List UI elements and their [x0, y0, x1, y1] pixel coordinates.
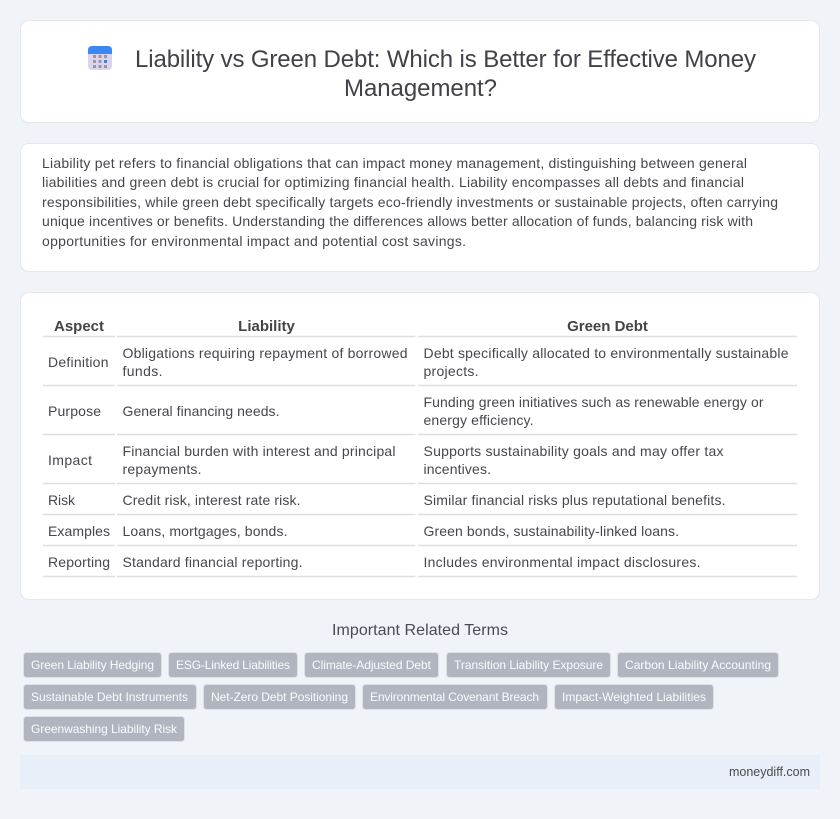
row: impact: Impact: [48, 452, 92, 468]
row: definition: projects.: [424, 363, 478, 379]
row: purpose: energy efficiency.: [424, 412, 534, 428]
title: Management?: [344, 75, 497, 102]
row: risk: Similar financial risks plus reputational benefits.: [424, 492, 726, 508]
row: examples: Examples: [48, 523, 110, 539]
row: reporting: Reporting: [48, 554, 110, 570]
table header: Aspect: [54, 318, 104, 335]
row: definition: Definition: [48, 354, 108, 370]
related term tags: Sustainable Debt Instruments: [31, 690, 188, 704]
related term tags: Net-Zero Debt Positioning: [211, 690, 348, 704]
title: Liability vs Green Debt: Which is Better for Effective Money: [135, 46, 756, 73]
related term tags: Impact-Weighted Liabilities: [562, 690, 706, 704]
row: reporting: [48, 554, 700, 570]
row: impact: Financial burden with interest and principal: [122, 443, 396, 459]
row: definition: [48, 345, 789, 379]
related term tags: ESG-Linked Liabilities: [176, 658, 290, 672]
icon: calendar: [88, 46, 112, 70]
related term tags: Greenwashing Liability Risk: [31, 722, 178, 736]
text block: description: Liability pet refers to financial obligations that can impact money management, distinguishing between general: [42, 155, 747, 171]
row: purpose: Funding green initiatives such as renewable energy or: [424, 394, 764, 410]
row: reporting: Includes environmental impact disclosures.: [424, 554, 700, 570]
row: risk: Credit risk, interest rate risk.: [122, 492, 300, 508]
text block: description: responsibilities, while green debt specifically targets eco-friendly investments or sustainable projects, often carrying: [42, 194, 778, 210]
text block: description: liabilities and green debt is crucial for optimizing financial health. Liability encompasses all debts and financial: [42, 174, 744, 190]
row: reporting: Standard financial reporting.: [122, 554, 302, 570]
row: impact: Supports sustainability goals and may offer tax: [424, 443, 724, 459]
row: impact: incentives.: [424, 461, 491, 477]
row: purpose: General financing needs.: [122, 403, 280, 419]
row: examples: [48, 523, 679, 539]
related term tags: Green Liability Hedging: [31, 658, 154, 672]
related term tags: [24, 652, 778, 742]
row: definition: Debt specifically allocated to environmentally sustainable: [424, 345, 789, 361]
row: risk: Risk: [48, 492, 76, 508]
footer: moneydiff.com: [729, 765, 810, 779]
title: [135, 46, 756, 102]
row: examples: Green bonds, sustainability-linked loans.: [424, 523, 679, 539]
text block: description: opportunities for environmental impact and potential cost savings.: [42, 233, 466, 249]
row: definition: Obligations requiring repayment of borrowed: [122, 345, 408, 361]
related term tags: Transition Liability Exposure: [454, 658, 603, 672]
row: risk: [48, 492, 726, 508]
table header: Green Debt: [567, 318, 648, 335]
row: impact: repayments.: [122, 461, 202, 477]
row: purpose: [48, 394, 764, 428]
row: examples: Loans, mortgages, bonds.: [122, 523, 288, 539]
panel: header: [20, 20, 820, 122]
table header: Liability: [238, 318, 295, 335]
panel: description: [20, 144, 820, 272]
text block: description: [42, 155, 778, 249]
panel: comparison table: [20, 292, 820, 600]
row: purpose: Purpose: [48, 403, 101, 419]
row: definition: funds.: [122, 363, 162, 379]
row: impact: [48, 443, 724, 477]
text block: description: unique incentives or benefits. Understanding the differences allows better allocation of funds, balancing risk with: [42, 213, 753, 229]
related term tags: Climate-Adjusted Debt: [312, 658, 432, 672]
related term tags: Carbon Liability Accounting: [625, 658, 771, 672]
footer: [20, 755, 820, 789]
table header: [54, 318, 648, 335]
heading: important related terms: Important Related Terms: [332, 622, 508, 639]
related term tags: Environmental Covenant Breach: [370, 690, 539, 704]
